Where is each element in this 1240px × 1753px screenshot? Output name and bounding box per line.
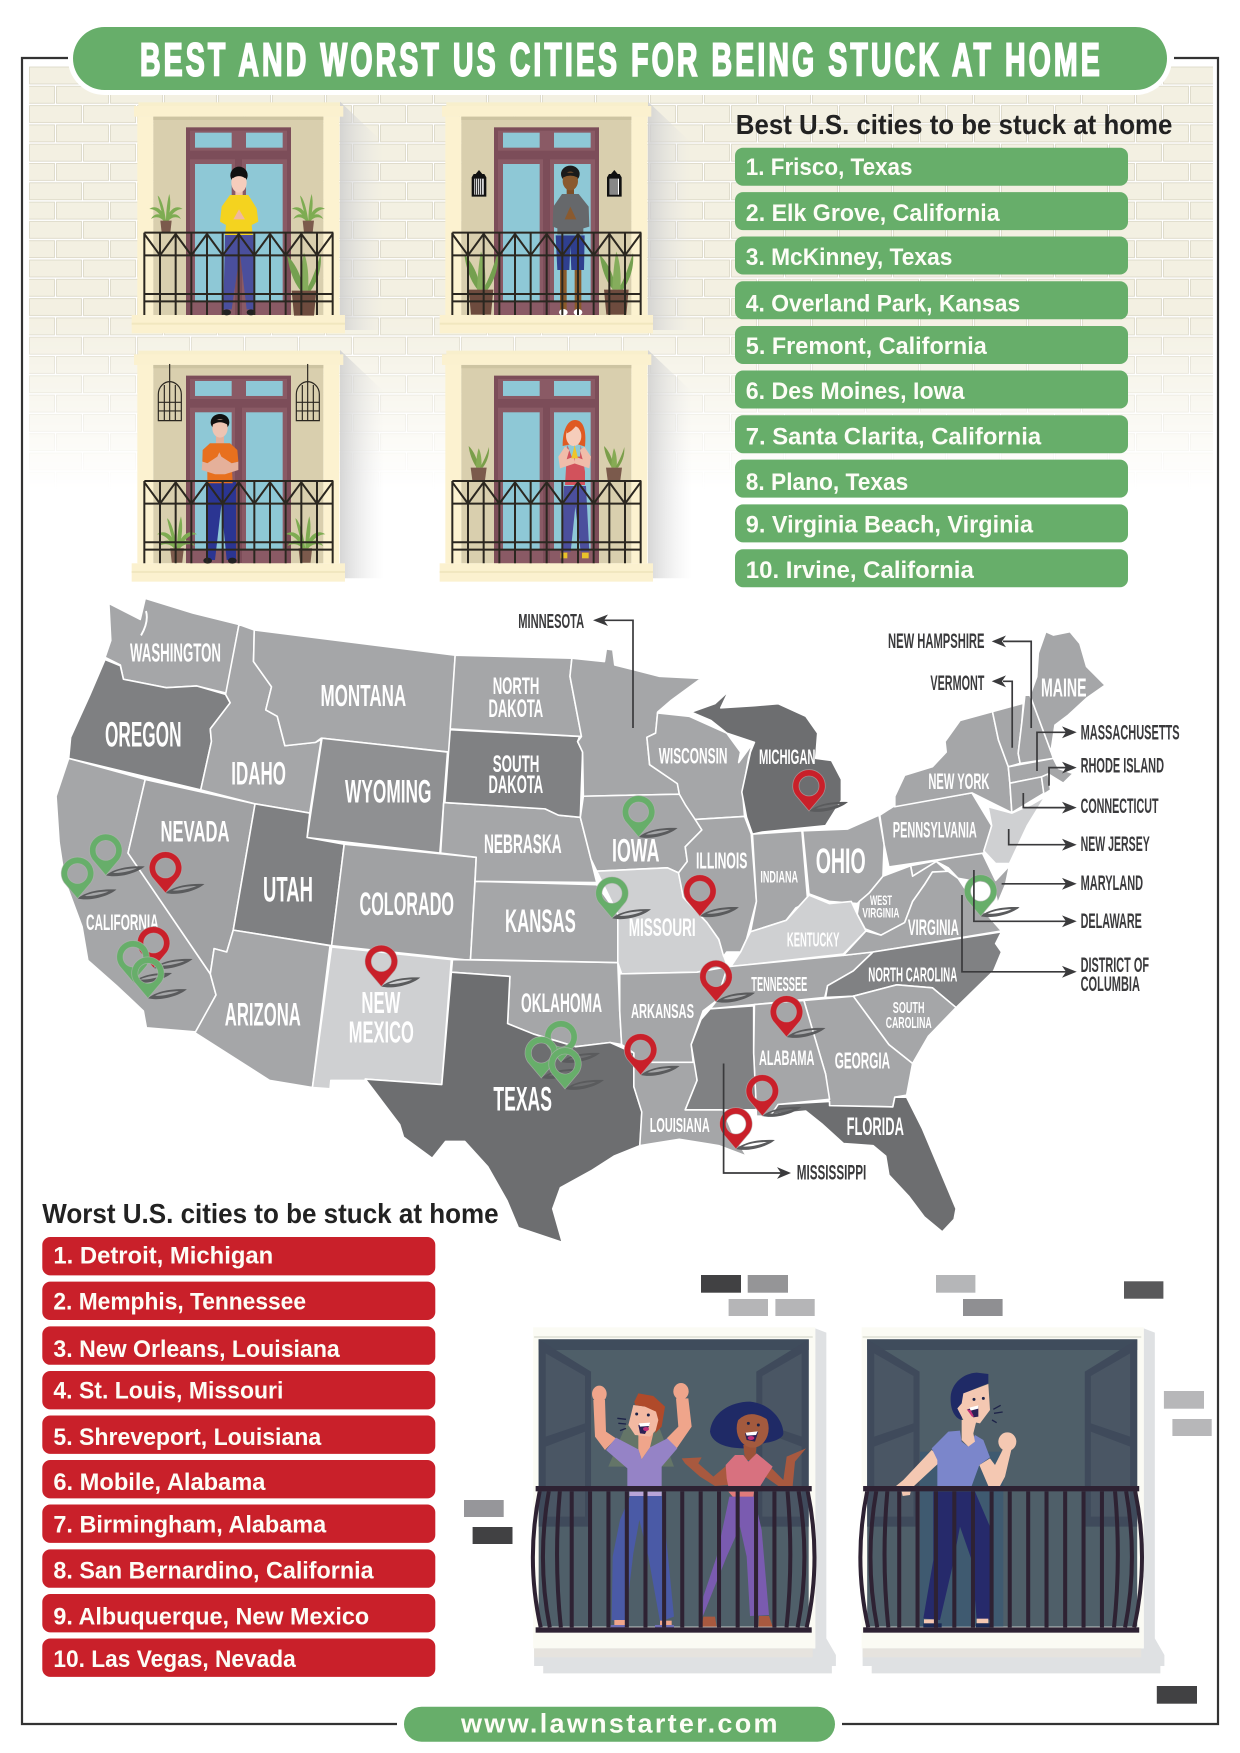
- callout labels: DISTRICT OF: [1081, 954, 1149, 977]
- state name labels: DAKOTA: [488, 771, 543, 799]
- angry window: man shouting: [860, 1327, 1164, 1673]
- person: man with fist: [896, 1373, 1016, 1627]
- state name labels: ARIZONA: [225, 997, 301, 1033]
- state name labels: VIRGINIA: [862, 904, 899, 920]
- callout labels: MISSISSIPPI: [797, 1161, 866, 1184]
- bird cages: [158, 364, 319, 421]
- best cities list: 5. Fremont, California: [746, 333, 987, 360]
- person: orange t-shirt: [202, 414, 238, 564]
- state: Florida: [756, 1097, 956, 1232]
- state name labels: NEW: [361, 985, 401, 1020]
- state: South Dakota: [445, 730, 583, 817]
- best cities list: 3. McKinney, Texas: [746, 244, 952, 271]
- state: Maine: [1030, 632, 1105, 752]
- state: Nebraska: [441, 803, 597, 883]
- state: Iowa: [580, 794, 702, 873]
- state: Maryland and Delaware: [911, 852, 1009, 904]
- state name labels: KENTUCKY: [787, 930, 840, 952]
- worst cities list: 8. San Bernardino, California: [53, 1558, 374, 1584]
- state name labels: GEORGIA: [835, 1048, 890, 1074]
- state name labels: WISCONSIN: [659, 743, 728, 768]
- worst cities list: 5. Shreveport, Louisiana: [53, 1424, 322, 1451]
- plants: [157, 516, 325, 563]
- state name labels: [86, 638, 1086, 1141]
- state name labels: OKLAHOMA: [521, 988, 602, 1018]
- state: New York: [895, 712, 1012, 813]
- state: Michigan: [691, 691, 841, 834]
- callout labels: NEW HAMPSHIRE: [888, 630, 984, 653]
- footer URL pill: [404, 1707, 835, 1742]
- state: Pennsylvania: [880, 793, 992, 867]
- best cities heading: Best U.S. cities to be stuck at home: [736, 109, 1172, 140]
- callout labels: MINNESOTA: [518, 611, 584, 633]
- state: Utah: [233, 804, 344, 946]
- best cities list: 10. Irvine, California: [746, 557, 974, 584]
- state: Virginia: [843, 871, 1002, 955]
- western and central states: [56, 598, 728, 1242]
- state name labels: SOUTH: [893, 1000, 924, 1017]
- state name labels: OHIO: [816, 842, 866, 881]
- state: Alabama: [754, 1000, 830, 1116]
- callout labels: COLUMBIA: [1081, 973, 1140, 996]
- state name labels: DAKOTA: [488, 695, 543, 723]
- callout labels: RHODE ISLAND: [1081, 754, 1164, 777]
- state: Texas: [365, 972, 642, 1242]
- balcony 4: woman with red hair: [440, 350, 692, 582]
- US map: [56, 598, 1180, 1242]
- state: Kentucky: [731, 895, 866, 967]
- red pins: worst cities: [137, 770, 848, 1150]
- worst cities list: 10. Las Vegas, Nevada: [53, 1646, 296, 1673]
- callout labels: NEW JERSEY: [1081, 833, 1150, 856]
- best cities list: 7. Santa Clarita, California: [746, 424, 1042, 451]
- state name labels: IDAHO: [231, 756, 286, 792]
- state: New Jersey: [984, 797, 1045, 864]
- state name labels: MICHIGAN: [759, 746, 816, 769]
- state: Indiana: [750, 831, 808, 932]
- person: grey sweater: [553, 166, 589, 316]
- best cities list: 9. Virginia Beach, Virginia: [746, 512, 1034, 539]
- state name labels: INDIANA: [760, 868, 798, 886]
- state: Minnesota: [570, 649, 701, 796]
- state name labels: MISSOURI: [629, 914, 696, 942]
- railing: [533, 1486, 814, 1633]
- state name labels: KANSAS: [505, 903, 576, 939]
- state: Illinois: [679, 816, 756, 956]
- callout labels: DELAWARE: [1081, 910, 1142, 933]
- plants: [464, 251, 633, 315]
- state: New Mexico: [312, 947, 451, 1089]
- state name labels: NORTH: [493, 673, 539, 700]
- scattered grey bricks: [464, 1275, 1212, 1704]
- balcony 1: man in yellow sweater: [132, 102, 384, 333]
- state: Vermont: [992, 703, 1023, 767]
- state: Mississippi: [685, 1006, 756, 1110]
- state: Rhode Island: [1041, 774, 1051, 794]
- worst cities list: 7. Birmingham, Alabama: [53, 1512, 327, 1538]
- state: Nevada: [128, 779, 255, 974]
- state: Wisconsin: [647, 713, 752, 819]
- worst cities list: [42, 1237, 435, 1677]
- railing: [860, 1486, 1142, 1633]
- title banner: BEST AND WORST US CITIES FOR BEING STUCK AT HOME: [140, 35, 1100, 86]
- state: North Carolina: [826, 932, 1002, 1008]
- footer URL pill: www.lawnstarter.com: [460, 1709, 778, 1739]
- callout arrows for small states: [593, 614, 1077, 1179]
- state name labels: PENNSYLVANIA: [893, 818, 977, 842]
- background: brick wall: [29, 66, 1213, 490]
- state name labels: WYOMING: [345, 774, 432, 810]
- eastern states: [634, 632, 1105, 1232]
- state: Montana: [254, 630, 455, 752]
- callout labels: CONNECTICUT: [1081, 795, 1159, 818]
- plants: [469, 446, 624, 480]
- state name labels: UTAH: [263, 870, 313, 910]
- plants: [149, 194, 325, 316]
- state name labels: CAROLINA: [886, 1015, 932, 1032]
- best cities list: 4. Overland Park, Kansas: [746, 290, 1020, 318]
- state name labels: CALIFORNIA: [86, 910, 159, 935]
- state name labels: IOWA: [612, 832, 660, 868]
- people: shouting couple: [592, 1383, 806, 1628]
- state name labels: NORTH CAROLINA: [868, 964, 957, 986]
- state name labels: ARKANSAS: [631, 1001, 694, 1023]
- state name labels: VIRGINIA: [908, 915, 959, 940]
- state name labels: ALABAMA: [759, 1047, 814, 1070]
- state: Wyoming: [307, 738, 448, 853]
- state name labels: OREGON: [105, 716, 182, 755]
- state name labels: ILLINOIS: [696, 848, 747, 874]
- state: California: [56, 758, 216, 1032]
- state: Connecticut: [1010, 777, 1044, 813]
- state name labels: LOUISIANA: [650, 1115, 710, 1137]
- state: Arkansas: [620, 967, 728, 1062]
- window frame and shutters: [533, 1327, 836, 1673]
- worst cities list: 3. New Orleans, Louisiana: [53, 1336, 340, 1363]
- best cities list: [735, 148, 1128, 587]
- state name labels: NEVADA: [160, 815, 230, 848]
- callout labels: [518, 611, 1180, 1184]
- state: Oklahoma: [451, 960, 622, 1047]
- worst cities list: 1. Detroit, Michigan: [53, 1243, 273, 1270]
- state: Idaho: [201, 625, 321, 813]
- Puget Sound inlet: [141, 611, 147, 635]
- state: West Virginia: [857, 861, 948, 935]
- worst cities list: 9. Albuquerque, New Mexico: [53, 1604, 369, 1630]
- state name labels: SOUTH: [493, 751, 539, 778]
- person: woman with red hair: [558, 420, 591, 558]
- state name labels: TEXAS: [493, 1081, 552, 1119]
- green pins: best cities: [61, 796, 1020, 1090]
- worst cities list: 6. Mobile, Alabama: [53, 1469, 266, 1496]
- callout labels: MARYLAND: [1081, 872, 1143, 895]
- balcony 2: man in grey sweater: [440, 102, 692, 333]
- state: Missouri: [597, 868, 728, 974]
- state: Georgia: [804, 996, 913, 1107]
- window frame and shutters: [862, 1327, 1164, 1673]
- balcony 3: man in orange t-shirt: [132, 350, 384, 582]
- angry window: couple shouting: [533, 1327, 836, 1673]
- wall lamps: [472, 170, 622, 197]
- state name labels: FLORIDA: [847, 1113, 904, 1141]
- state: Kansas: [470, 881, 618, 963]
- state: Colorado: [332, 844, 476, 960]
- state name labels: TENNESSEE: [751, 974, 807, 996]
- worst cities list: 4. St. Louis, Missouri: [53, 1378, 283, 1405]
- best cities list: 6. Des Moines, Iowa: [746, 378, 965, 405]
- state name labels: MEXICO: [349, 1014, 414, 1050]
- state name labels: WASHINGTON: [130, 638, 221, 668]
- state name labels: COLORADO: [360, 886, 454, 922]
- person: yellow sweater: [220, 167, 258, 315]
- state: North Dakota: [450, 655, 581, 736]
- state name labels: NEW YORK: [928, 769, 989, 794]
- worst cities list: 2. Memphis, Tennessee: [53, 1289, 306, 1316]
- state: Louisiana: [634, 1062, 747, 1156]
- worst cities heading: Worst U.S. cities to be stuck at home: [42, 1198, 499, 1229]
- state: New Hampshire: [1018, 695, 1053, 763]
- callout labels: VERMONT: [930, 672, 984, 695]
- state name labels: MONTANA: [320, 678, 406, 713]
- state: Arizona: [195, 930, 330, 1088]
- state: Tennessee: [710, 952, 873, 1009]
- state name labels: NEBRASKA: [484, 829, 562, 859]
- state: Oregon: [69, 659, 230, 790]
- state: South Carolina: [853, 985, 956, 1064]
- best cities list: 1. Frisco, Texas: [746, 154, 912, 181]
- balcony 4 railing: [452, 481, 641, 563]
- state: Washington: [105, 598, 239, 693]
- state name labels: MAINE: [1041, 672, 1086, 702]
- best cities list: 8. Plano, Texas: [746, 469, 908, 496]
- best cities list: 2. Elk Grove, California: [746, 200, 1000, 227]
- state: Ohio: [803, 815, 884, 904]
- state: Massachusetts: [1008, 758, 1073, 783]
- state name labels: WEST: [870, 892, 892, 908]
